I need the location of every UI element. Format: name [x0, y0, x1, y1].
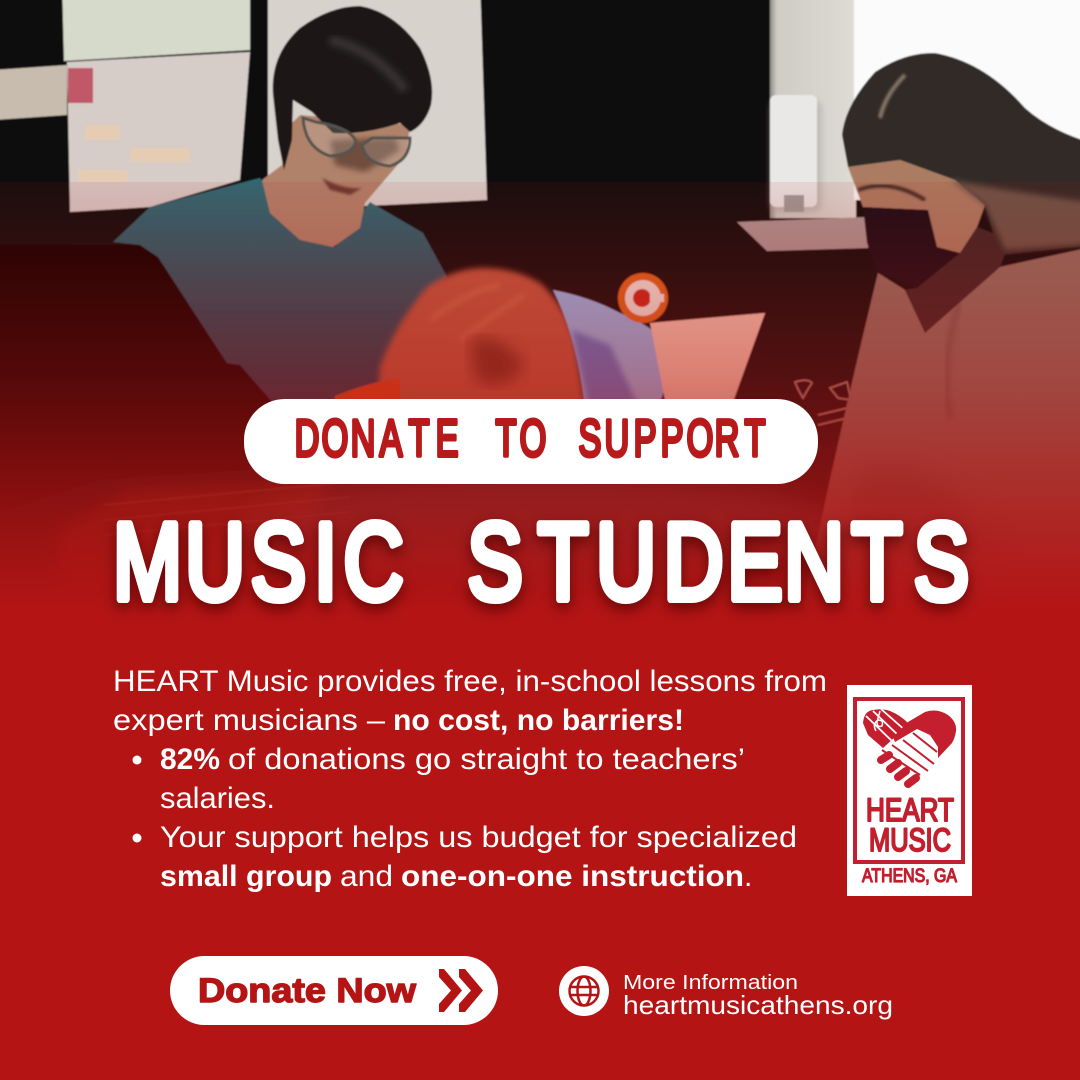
logo: heart music athens: MUSIC	[869, 822, 951, 858]
left hand stripes	[863, 709, 908, 748]
icon: heart of two hands	[863, 709, 956, 784]
logo: heart music athens: ATHENS, GA	[862, 866, 957, 887]
window and wall, right	[770, 0, 856, 218]
woman's sweatshirt	[800, 243, 1080, 620]
bullet one: 82%	[160, 743, 220, 776]
banner: donate to support: DONATE TO SUPPORT	[295, 410, 765, 468]
body text block	[113, 665, 827, 893]
logo: heart music athens: HEART	[866, 792, 954, 828]
bullet two: .	[744, 860, 752, 893]
icon: double chevron arrow	[439, 969, 483, 1012]
clasped stripes	[882, 730, 938, 775]
website information	[623, 972, 893, 1020]
red hair	[376, 268, 590, 440]
music stand	[0, 244, 275, 520]
icon: globe	[559, 966, 609, 1016]
button: donate now	[170, 956, 498, 1025]
bullet one	[132, 743, 745, 815]
blue jacket	[553, 290, 669, 410]
heading: music students: MUSIC STUDENTS	[113, 500, 969, 623]
treble clef mark	[874, 711, 882, 731]
shelf	[737, 217, 868, 251]
bullet two: and	[340, 860, 393, 893]
guitar tuning pegs	[795, 380, 860, 425]
bullet one: salaries.	[160, 782, 275, 815]
soft body highlight, lower centre	[240, 475, 840, 585]
website information: More Information	[623, 972, 798, 994]
body text block: HEART Music provides free, in-school lessons from	[113, 665, 827, 698]
hair	[273, 6, 432, 170]
teal shirt	[113, 178, 447, 420]
black mask	[863, 207, 960, 288]
banner: donate to support	[244, 399, 818, 484]
fingers	[881, 755, 916, 784]
neck and face	[262, 115, 410, 247]
orange guitar body	[335, 378, 400, 420]
glasses	[303, 118, 410, 166]
bullet two: one-on-one instruction	[401, 860, 744, 893]
body text block: no cost, no barriers!	[393, 704, 684, 737]
wall papers	[0, 0, 487, 212]
right hand solid	[893, 711, 956, 758]
bullet two	[132, 821, 797, 893]
sticker with letter C	[618, 273, 668, 323]
woman's neck	[905, 227, 1010, 333]
guitar strings	[105, 482, 350, 535]
website information: heartmusicathens.org	[623, 990, 893, 1020]
bullet two: Your support helps us budget for specialized	[160, 821, 797, 854]
woman's hair	[842, 53, 1080, 255]
woman's face	[848, 160, 985, 253]
body text block: expert musicians –	[113, 704, 385, 737]
button: donate now: Donate Now	[198, 972, 417, 1010]
bullet one: of donations go straight to teachers’	[228, 743, 745, 776]
bullet two: small group	[160, 860, 332, 893]
soap dispenser	[770, 100, 822, 212]
logo: heart music athens	[847, 685, 972, 896]
pink chair	[650, 313, 765, 410]
